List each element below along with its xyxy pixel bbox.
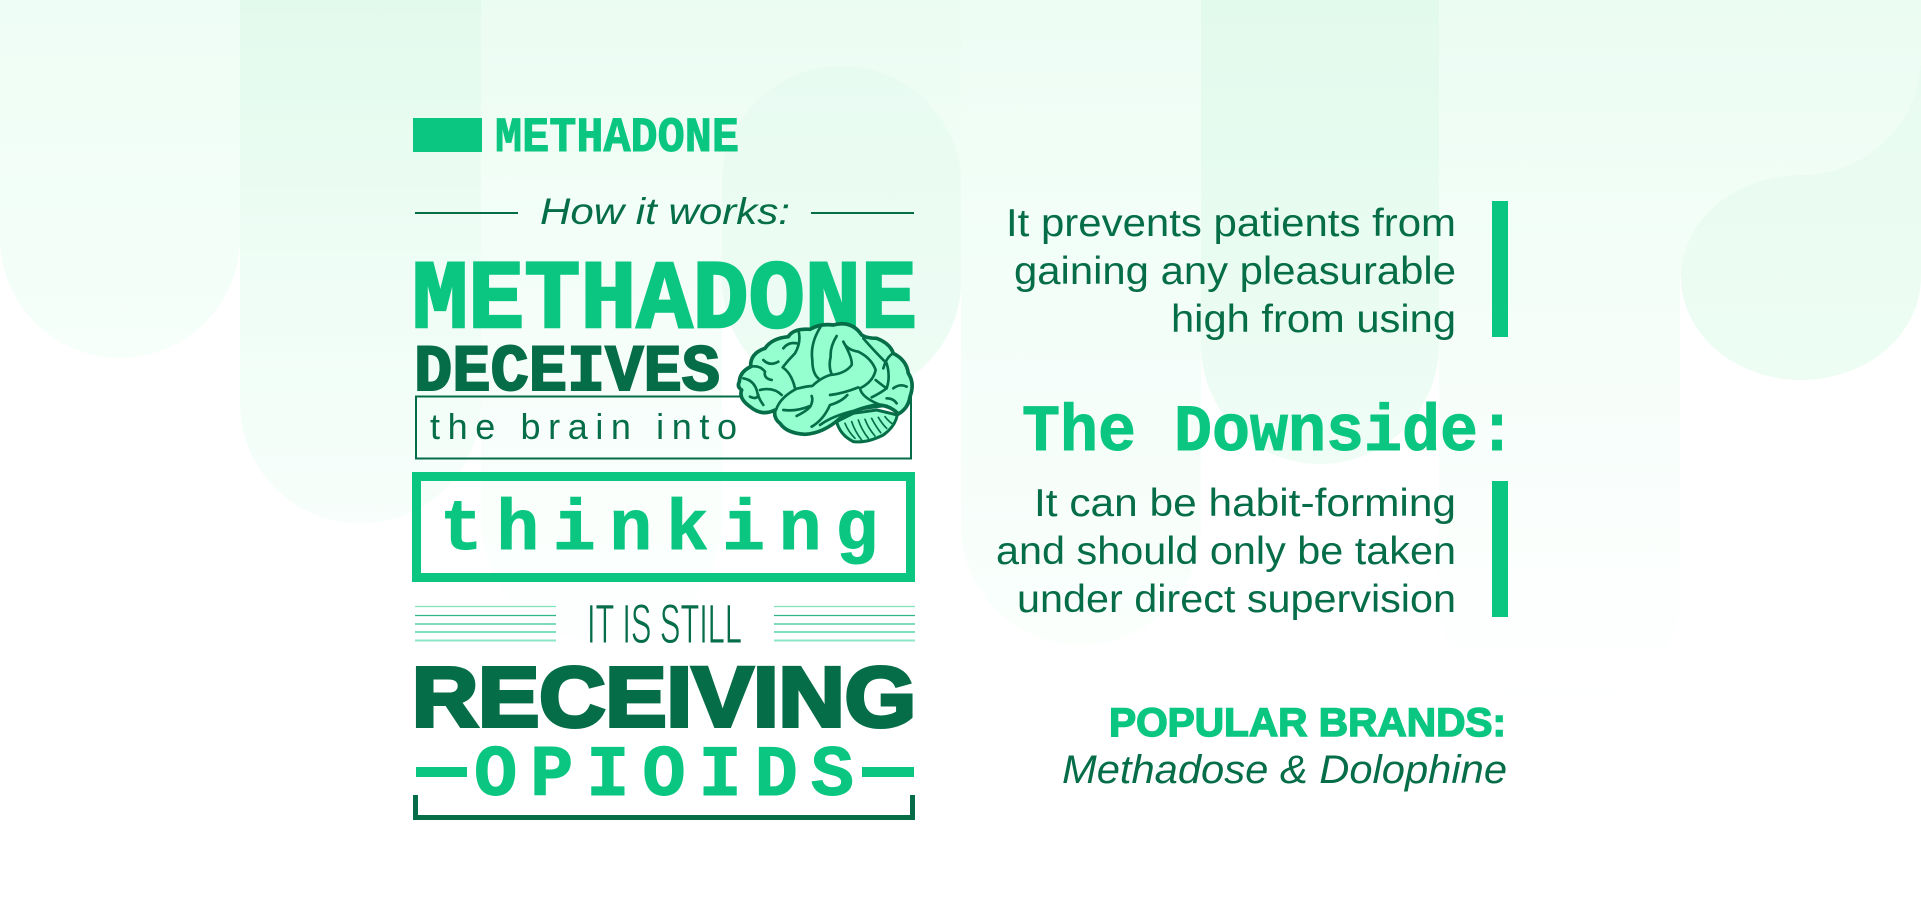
how it works heading: How it works:	[540, 191, 790, 232]
RECEIVING headline: RECEIVING	[412, 650, 916, 744]
popular brands label: POPULAR BRANDS:	[1109, 701, 1506, 745]
header tag block	[413, 118, 482, 152]
downside text: under direct supervision	[1017, 578, 1456, 621]
the brain into box: the brain into	[430, 406, 737, 447]
thinking box: thinking	[440, 491, 878, 571]
right panel: effects and downside	[996, 201, 1516, 792]
benefit text: gaining any pleasurable	[1014, 250, 1456, 293]
it is still with striped rules: IT IS STILL	[587, 592, 742, 655]
downside text: and should only be taken	[996, 530, 1456, 573]
brand names: Methadose & Dolophine	[1062, 748, 1507, 792]
bottom bracket	[416, 795, 912, 818]
benefit text	[1006, 202, 1456, 341]
downside text: It can be habit-forming	[1034, 482, 1456, 525]
left panel: how methadone works	[412, 110, 917, 818]
background rounded columns	[0, 0, 1921, 700]
header title: METHADONE	[495, 110, 739, 166]
DECEIVES headline: DECEIVES	[414, 335, 720, 410]
the brain into box	[416, 396, 911, 458]
METHADONE headline: METHADONE	[412, 247, 917, 357]
benefit accent bar	[1492, 201, 1508, 337]
the downside heading: The Downside:	[1022, 395, 1516, 470]
downside text	[996, 482, 1456, 621]
benefit text: It prevents patients from	[1006, 202, 1456, 245]
downside accent bar	[1492, 481, 1508, 617]
benefit text: high from using	[1171, 298, 1456, 341]
icon: brain	[738, 324, 912, 442]
OPIOIDS headline with dashes: OPIOIDS	[474, 735, 854, 817]
